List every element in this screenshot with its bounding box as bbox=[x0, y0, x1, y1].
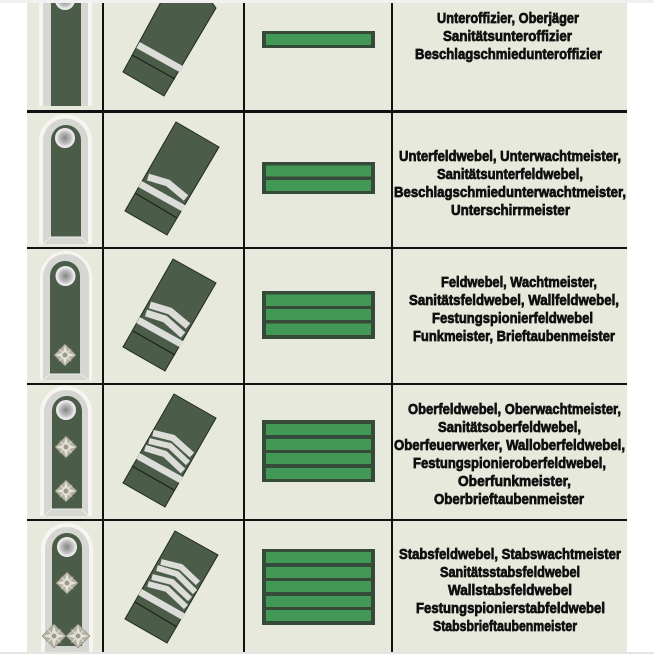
green rank bar 1 bbox=[262, 31, 375, 48]
rank names 4: Sanitätsoberfeldwebel, bbox=[438, 419, 581, 436]
rank names 5: Festungspionierstabfeldwebel bbox=[416, 600, 605, 617]
rank names 4: Oberbrieftaubenmeister bbox=[434, 491, 584, 508]
rank names 5: Wallstabsfeldwebel bbox=[448, 582, 572, 599]
green rank bar 4 bbox=[262, 420, 375, 482]
star pip bbox=[55, 480, 77, 502]
rank names 2: Unterschirrmeister bbox=[451, 202, 570, 219]
row 1: Unteroffizier bbox=[39, 0, 602, 106]
rank names 2 bbox=[394, 148, 626, 219]
rank names 5: Sanitätsstabsfeldwebel bbox=[440, 564, 580, 581]
rank names 5 bbox=[399, 546, 621, 635]
green rank bar 2 bbox=[262, 162, 375, 194]
rank names 3: Feldwebel, Wachtmeister, bbox=[441, 274, 597, 291]
rank names 1 bbox=[415, 10, 602, 63]
angled strap 3 bbox=[123, 259, 216, 371]
rank names 1: Sanitätsunteroffizier bbox=[443, 28, 572, 45]
green rank bar 3 bbox=[262, 291, 375, 339]
shoulder board 5 bbox=[41, 523, 93, 652]
row 4: Oberfeldwebel bbox=[40, 386, 625, 516]
star pip bbox=[55, 436, 77, 458]
rank names 2: Unterfeldwebel, Unterwachtmeister, bbox=[399, 148, 621, 165]
angled strap 2 bbox=[125, 122, 219, 235]
rank names 1: Unteroffizier, Oberjäger bbox=[437, 10, 579, 27]
star pip bbox=[66, 624, 90, 648]
star pip bbox=[42, 624, 66, 648]
angled strap 4 bbox=[123, 394, 216, 507]
shoulder board 4 bbox=[40, 386, 92, 516]
rank names 5: Stabsfeldwebel, Stabswachtmeister bbox=[399, 546, 621, 563]
rank names 1: Beschlagschmiedunteroffizier bbox=[415, 46, 602, 63]
shoulder board 1 bbox=[39, 0, 92, 106]
rank names 4: Oberfeldwebel, Oberwachtmeister, bbox=[408, 401, 621, 418]
shoulder board 2 bbox=[39, 115, 92, 244]
row 3: Feldwebel bbox=[40, 251, 619, 380]
rank names 2: Beschlagschmiedunterwachtmeister, bbox=[394, 184, 626, 201]
rank names 3: Festungspionierfeldwebel bbox=[432, 310, 593, 327]
rank names 3: Sanitätsfeldwebel, Wallfeldwebel, bbox=[409, 292, 619, 309]
rank names 3: Funkmeister, Brieftaubenmeister bbox=[413, 328, 615, 345]
green rank bar 5 bbox=[262, 549, 375, 625]
star pip bbox=[54, 344, 76, 366]
row 2: Unterfeldwebel bbox=[39, 115, 626, 244]
rank names 3 bbox=[409, 274, 619, 345]
star pip bbox=[56, 572, 78, 594]
row 5: Stabsfeldwebel bbox=[41, 523, 621, 652]
rank names 4: Oberfunkmeister, bbox=[458, 473, 571, 490]
angled strap 5 bbox=[125, 531, 218, 643]
rank names 2: Sanitätsunterfeldwebel, bbox=[437, 166, 583, 183]
rank names 4: Festungspionieroberfeldwebel, bbox=[413, 455, 606, 472]
angled strap 1 bbox=[123, 0, 216, 96]
shoulder board 3 bbox=[40, 251, 92, 380]
rank names 4 bbox=[394, 401, 625, 508]
rank names 4: Oberfeuerwerker, Walloberfeldwebel, bbox=[394, 437, 625, 454]
rank names 5: Stabsbrieftaubenmeister bbox=[433, 618, 577, 635]
